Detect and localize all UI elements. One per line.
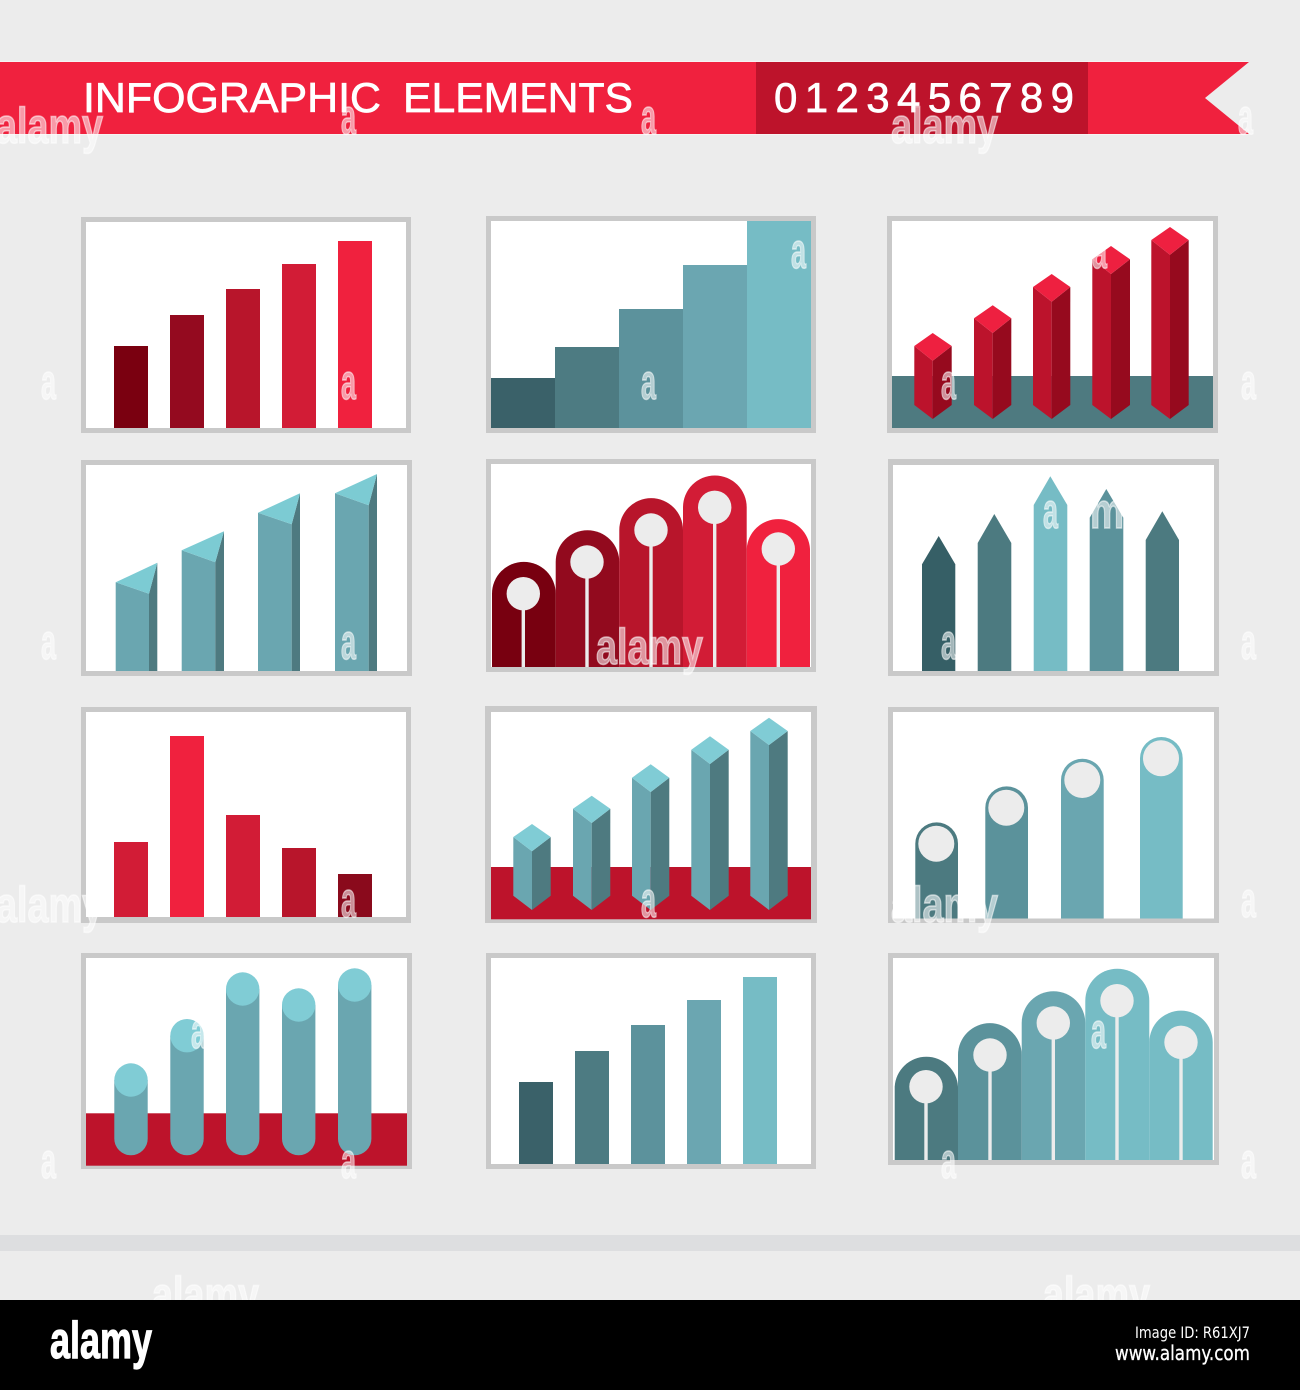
watermarks: a xyxy=(641,872,657,928)
watermarks: a xyxy=(941,614,957,670)
panel: red peak bars xyxy=(81,707,411,923)
watermarks: m xyxy=(1090,483,1124,539)
watermarks: a xyxy=(1241,1133,1257,1189)
watermarks: a xyxy=(1092,223,1108,279)
watermarks: a xyxy=(1241,872,1257,928)
panel: red isometric columns xyxy=(887,216,1218,433)
watermarks: a xyxy=(41,614,57,670)
watermarks: a xyxy=(941,1133,957,1189)
watermarks: a xyxy=(1091,1003,1107,1059)
watermarks: a xyxy=(1241,354,1257,410)
bar chart: red ascending xyxy=(114,241,372,428)
watermarks: a xyxy=(191,1003,207,1059)
panel: teal arches xyxy=(888,953,1219,1165)
watermarks: alamy xyxy=(891,877,998,933)
bar chart: teal ascending xyxy=(519,977,777,1164)
arch chart xyxy=(895,969,1213,1160)
watermarks: a xyxy=(41,354,57,410)
cylinder chart xyxy=(114,968,371,1155)
watermarks: a xyxy=(791,742,807,798)
panel: teal pills xyxy=(888,707,1219,923)
footer logo: alamy xyxy=(50,1312,152,1370)
watermarks: alamy xyxy=(596,619,703,675)
watermarks: a xyxy=(341,89,357,145)
panel: red arches xyxy=(486,459,816,672)
arch chart xyxy=(492,475,810,667)
watermarks: a xyxy=(641,89,657,145)
teal base band xyxy=(892,376,1213,428)
bottom divider strip xyxy=(0,1235,1300,1251)
isometric column chart xyxy=(513,718,788,910)
watermarks: a xyxy=(1241,614,1257,670)
watermarks: a xyxy=(341,354,357,410)
panel: teal cylinders xyxy=(81,953,412,1169)
panel: teal arrows xyxy=(888,459,1219,676)
watermarks: alamy xyxy=(1043,1267,1150,1323)
bar chart: red peak xyxy=(114,736,372,917)
slanted column chart xyxy=(116,474,377,671)
digits: 0123456789 xyxy=(774,74,1074,121)
watermarks: a xyxy=(791,223,807,279)
watermarks: alamy xyxy=(152,1267,259,1323)
title: ELEMENTS xyxy=(403,74,633,121)
red base band xyxy=(86,1113,407,1166)
watermarks: alamy xyxy=(0,877,103,933)
arrow column chart xyxy=(922,476,1179,671)
watermarks: alamy xyxy=(891,98,998,154)
footer bar xyxy=(0,1300,1300,1390)
website: www.alamy.com xyxy=(1115,1341,1250,1365)
staircase chart xyxy=(491,221,811,428)
watermarks: a xyxy=(341,614,357,670)
watermarks: alamy xyxy=(0,98,103,154)
banner ribbon xyxy=(0,61,1249,135)
red base band xyxy=(491,867,811,919)
panel: teal isometric columns xyxy=(485,706,817,923)
image id: Image ID: R61XJ7 xyxy=(1135,1323,1250,1342)
watermarks: a xyxy=(41,1133,57,1189)
title xyxy=(83,74,633,121)
watermarks: a xyxy=(941,354,957,410)
watermarks: a xyxy=(1238,89,1254,145)
panel: teal ascending bars xyxy=(486,953,816,1169)
watermarks: a xyxy=(341,872,357,928)
title: INFOGRAPHIC xyxy=(83,74,381,121)
panel: stepped red bars xyxy=(81,217,411,433)
panel: teal slanted columns xyxy=(81,460,412,676)
number panel background xyxy=(756,62,1088,134)
watermarks: a xyxy=(641,354,657,410)
panel: teal staircase xyxy=(486,216,816,433)
watermarks: a xyxy=(791,1003,807,1059)
pill chart xyxy=(915,737,1183,918)
watermarks: a xyxy=(1043,483,1059,539)
isometric column chart xyxy=(914,227,1189,419)
watermarks: a xyxy=(341,1133,357,1189)
